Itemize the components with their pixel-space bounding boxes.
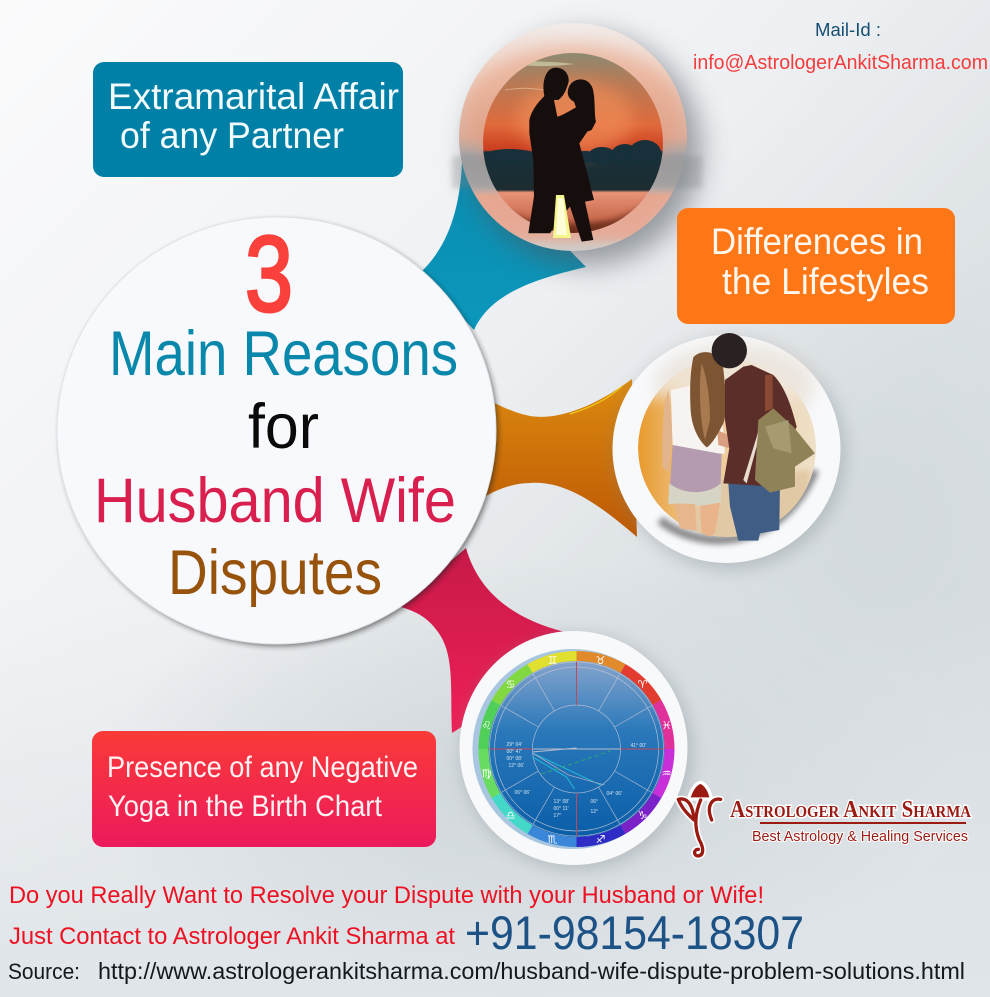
planet table text: 13° 08' [554,799,569,805]
callout: negative yoga: Presence of any Negative [107,751,418,784]
call to action: Just Contact to Astrologer Ankit Sharma at [9,923,455,950]
zodiac glyphs: ♉ [596,654,605,667]
callout: extramarital affair: of any Partner [120,115,344,156]
planet table text: 41° 00' [630,743,646,749]
main circle [57,217,496,644]
callout: extramarital affair [93,62,403,177]
planet table text: 00° 08' [506,756,522,762]
contact email: Mail-Id : [815,20,881,40]
callout: extramarital affair: Extramarital Affair [108,76,399,117]
zodiac glyphs [482,654,671,846]
call to action [9,882,804,959]
zodiac glyphs: ♍ [482,767,491,780]
headline: Husband Wife [94,466,456,536]
logo: Best Astrology & Healing Services [752,829,968,845]
zodiac glyphs: ♏ [548,833,558,846]
connector: crimson [398,548,565,733]
planet table text: 12° 06' [508,763,524,769]
contact email: info@AstrologerAnkitSharma.com [693,52,988,74]
icon: sun reflection [553,195,571,238]
zodiac glyphs: ♐ [596,833,605,846]
zodiac glyphs: ♊ [548,654,557,667]
circle: couple at sunset photo [452,23,702,266]
planet table text: 12° [590,809,598,815]
source: Source: [8,959,80,984]
planet table text: 00° 47' [506,749,522,755]
headline: Main Reasons [109,319,458,389]
zodiac glyphs: ♑ [638,809,647,822]
contact email [693,20,988,74]
call to action: Do you Really Want to Resolve your Dispute with your Husband or Wife! [9,882,764,909]
headline: 3 [245,213,293,334]
headline [94,213,458,608]
planet table text [506,742,646,819]
circle: couple walking photo [612,333,846,570]
callout: lifestyles: the Lifestyles [722,261,929,302]
planet table text: 29° 04' [506,742,522,748]
zodiac glyphs: ♓ [662,719,671,732]
headline: for [248,392,319,462]
callout: negative yoga [92,731,436,847]
connector: orange [484,379,637,537]
icon: woman from behind [662,352,729,537]
planet table text: 00° 11' [554,806,569,812]
planet table text: 04° 06' [606,791,622,797]
zodiac glyphs: ♎ [506,809,515,822]
circle: birth chart [460,631,693,870]
logo [678,784,972,856]
zodiac glyphs: ♈ [638,678,648,691]
phone number: +91-98154-18307 [465,906,804,959]
main circle shadow [60,220,498,646]
planet table text: 06° [590,799,598,805]
source: http://www.astrologerankitsharma.com/husband-wife-dispute-problem-solutions.html [98,958,965,984]
zodiac glyphs: ♒ [662,767,671,780]
zodiac glyphs: ♌ [482,719,491,732]
headline: Disputes [168,538,382,608]
icon: couple silhouette [528,68,596,242]
zodiac colour ring [484,656,670,842]
aspect lines [532,748,620,789]
callout: lifestyles: Differences in [711,221,923,262]
callout: lifestyles [677,208,955,324]
planet table text: 06° 06' [514,790,530,796]
zodiac glyphs: ♋ [506,678,515,691]
tree band beyond the circle [452,156,702,188]
connector: teal [420,163,586,330]
planet table text: 17° [554,813,561,819]
icon: man with backpack [712,333,815,541]
icon: ganesha [678,784,721,856]
callout: negative yoga: Yoga in the Birth Chart [108,790,383,823]
